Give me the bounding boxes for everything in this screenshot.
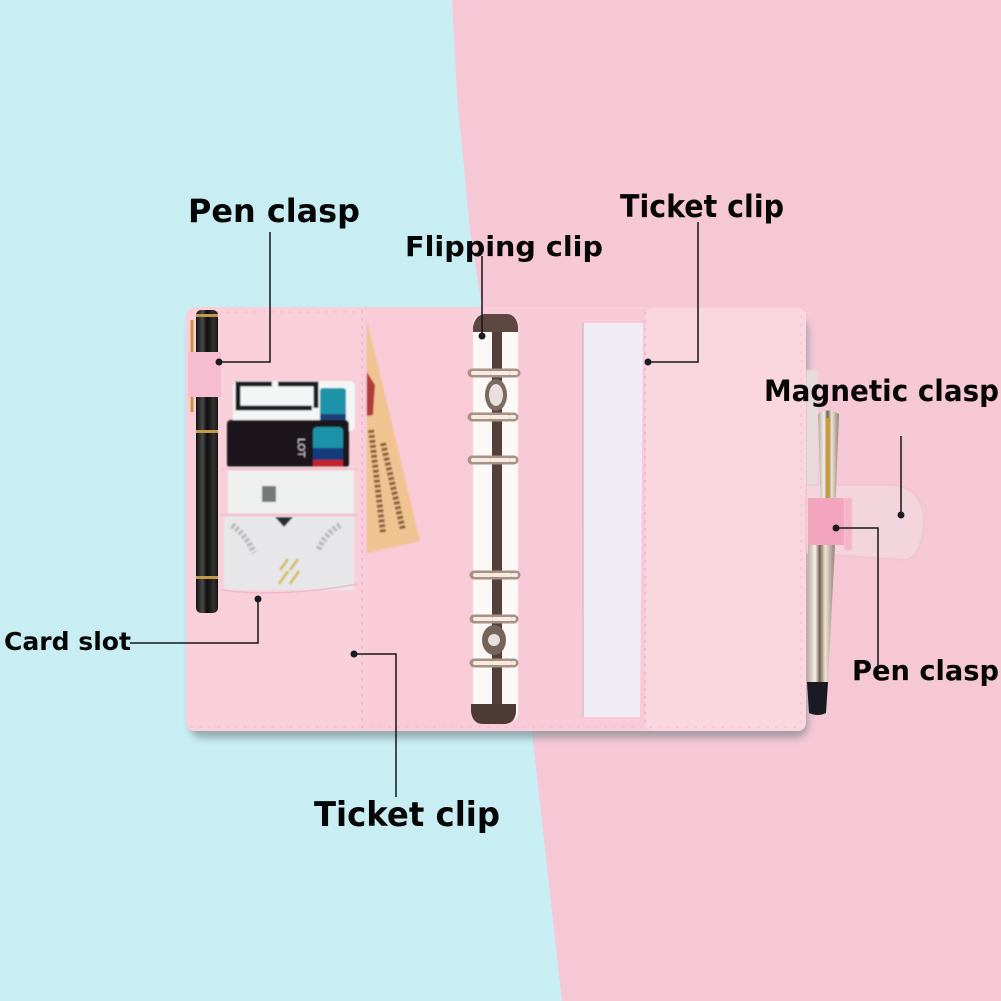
leader dots xyxy=(216,332,904,658)
gold pen on the right xyxy=(807,410,843,715)
label: flipping clip: Flipping clip xyxy=(405,230,603,263)
card pockets stitching xyxy=(221,469,358,593)
cards in the slots xyxy=(224,381,355,590)
binder cover xyxy=(186,307,806,731)
pen clasp band xyxy=(188,352,221,397)
shadow strip beside binder xyxy=(806,370,818,490)
label: pen clasp right: Pen clasp xyxy=(852,654,999,687)
leader lines xyxy=(130,222,901,797)
binder shadow xyxy=(190,318,808,738)
paper ticket behind pocket xyxy=(367,320,420,553)
clasps xyxy=(485,379,507,411)
right pocket panel xyxy=(645,308,806,731)
patterned card xyxy=(224,516,354,590)
white card xyxy=(233,381,355,431)
label: pen clasp top: Pen clasp xyxy=(188,192,360,230)
panel: open binder xyxy=(186,307,806,731)
right inner panel xyxy=(520,309,645,729)
label: ticket clip top: Ticket clip xyxy=(620,189,784,225)
label: ticket clip bottom: Ticket clip xyxy=(314,795,500,835)
rings xyxy=(472,373,516,663)
binder ring mechanism xyxy=(471,314,518,724)
left pocket panel xyxy=(186,308,362,731)
end caps xyxy=(473,314,518,332)
centre fold xyxy=(366,309,471,729)
white backing plate xyxy=(473,316,518,721)
white paper strip xyxy=(582,323,643,717)
pen: black pen on left xyxy=(188,310,221,613)
cards in the slots: LOT xyxy=(295,438,306,458)
black card xyxy=(227,420,349,468)
magnetic clasp xyxy=(806,485,924,560)
grey card xyxy=(228,467,354,517)
label: card slot: Card slot xyxy=(4,627,131,656)
